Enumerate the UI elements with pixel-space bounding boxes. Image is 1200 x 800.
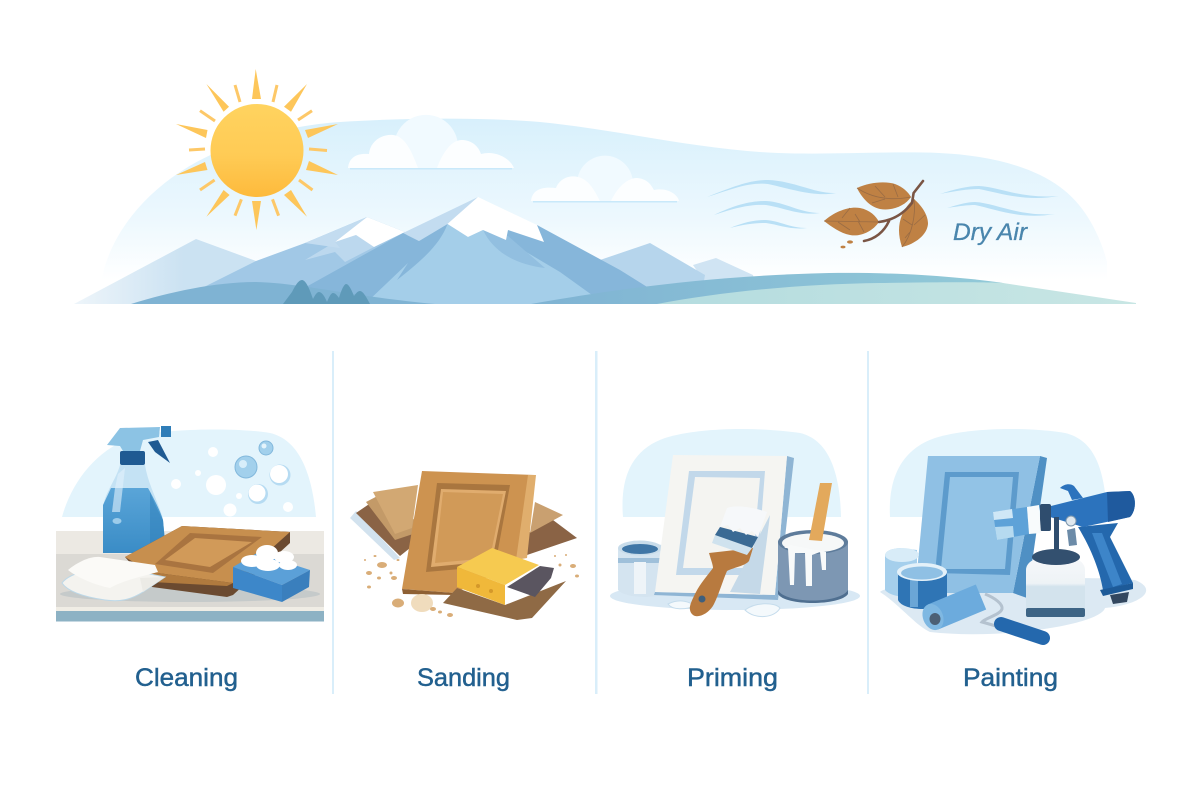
icon: wooden door — [402, 471, 536, 595]
hill left — [131, 282, 435, 304]
sandpaper sheets — [350, 485, 577, 560]
trees — [283, 280, 370, 304]
sky backdrop — [100, 119, 1107, 304]
panel: cleaning — [56, 426, 324, 692]
spilled primer — [668, 601, 780, 617]
counter shadow — [60, 586, 320, 602]
icon: dry leaves — [824, 181, 928, 248]
counter — [56, 531, 324, 622]
paint puddle — [610, 582, 860, 610]
icon: spray bottle — [103, 426, 171, 553]
backdrop cleaning — [62, 429, 316, 517]
icon: cabinet door — [125, 526, 290, 597]
icon: primer tin left — [618, 540, 662, 597]
label: Cleaning: Cleaning — [135, 664, 238, 692]
cloud left — [348, 115, 514, 170]
panel: painting — [880, 429, 1146, 692]
wind lines — [707, 180, 1059, 228]
icon: sanding block — [457, 548, 554, 605]
label: Painting: Painting — [963, 664, 1058, 692]
icon: sanding paper — [443, 581, 566, 620]
icon: spray gun — [993, 484, 1135, 604]
label: Sanding: Sanding — [417, 664, 510, 692]
hill pale green — [657, 282, 1136, 304]
icon: sponge — [233, 545, 310, 602]
icon: sun — [176, 69, 338, 230]
cloud right — [531, 156, 679, 202]
backdrop priming — [622, 429, 841, 517]
icon: towel — [62, 557, 165, 601]
hill teal — [531, 273, 1040, 304]
floor shadow — [880, 578, 1146, 634]
panel: sanding — [350, 471, 579, 692]
label: Dry Air: Dry Air — [953, 219, 1028, 246]
backdrop painting — [890, 429, 1107, 517]
icon: blue door — [915, 456, 1047, 598]
label: Priming: Priming — [687, 664, 778, 692]
icon: paint tins — [885, 548, 947, 609]
icon: primed door — [654, 455, 794, 600]
panel: priming — [610, 429, 860, 692]
icon: paint cup — [1026, 517, 1085, 617]
mountains — [74, 197, 760, 304]
icon: paint roller — [919, 594, 1043, 638]
icon: paint brush — [690, 506, 767, 616]
bubbles — [171, 441, 293, 516]
icon: primer can — [778, 483, 848, 603]
sawdust — [364, 554, 579, 617]
hero scene: dry sunny climate — [74, 69, 1136, 304]
